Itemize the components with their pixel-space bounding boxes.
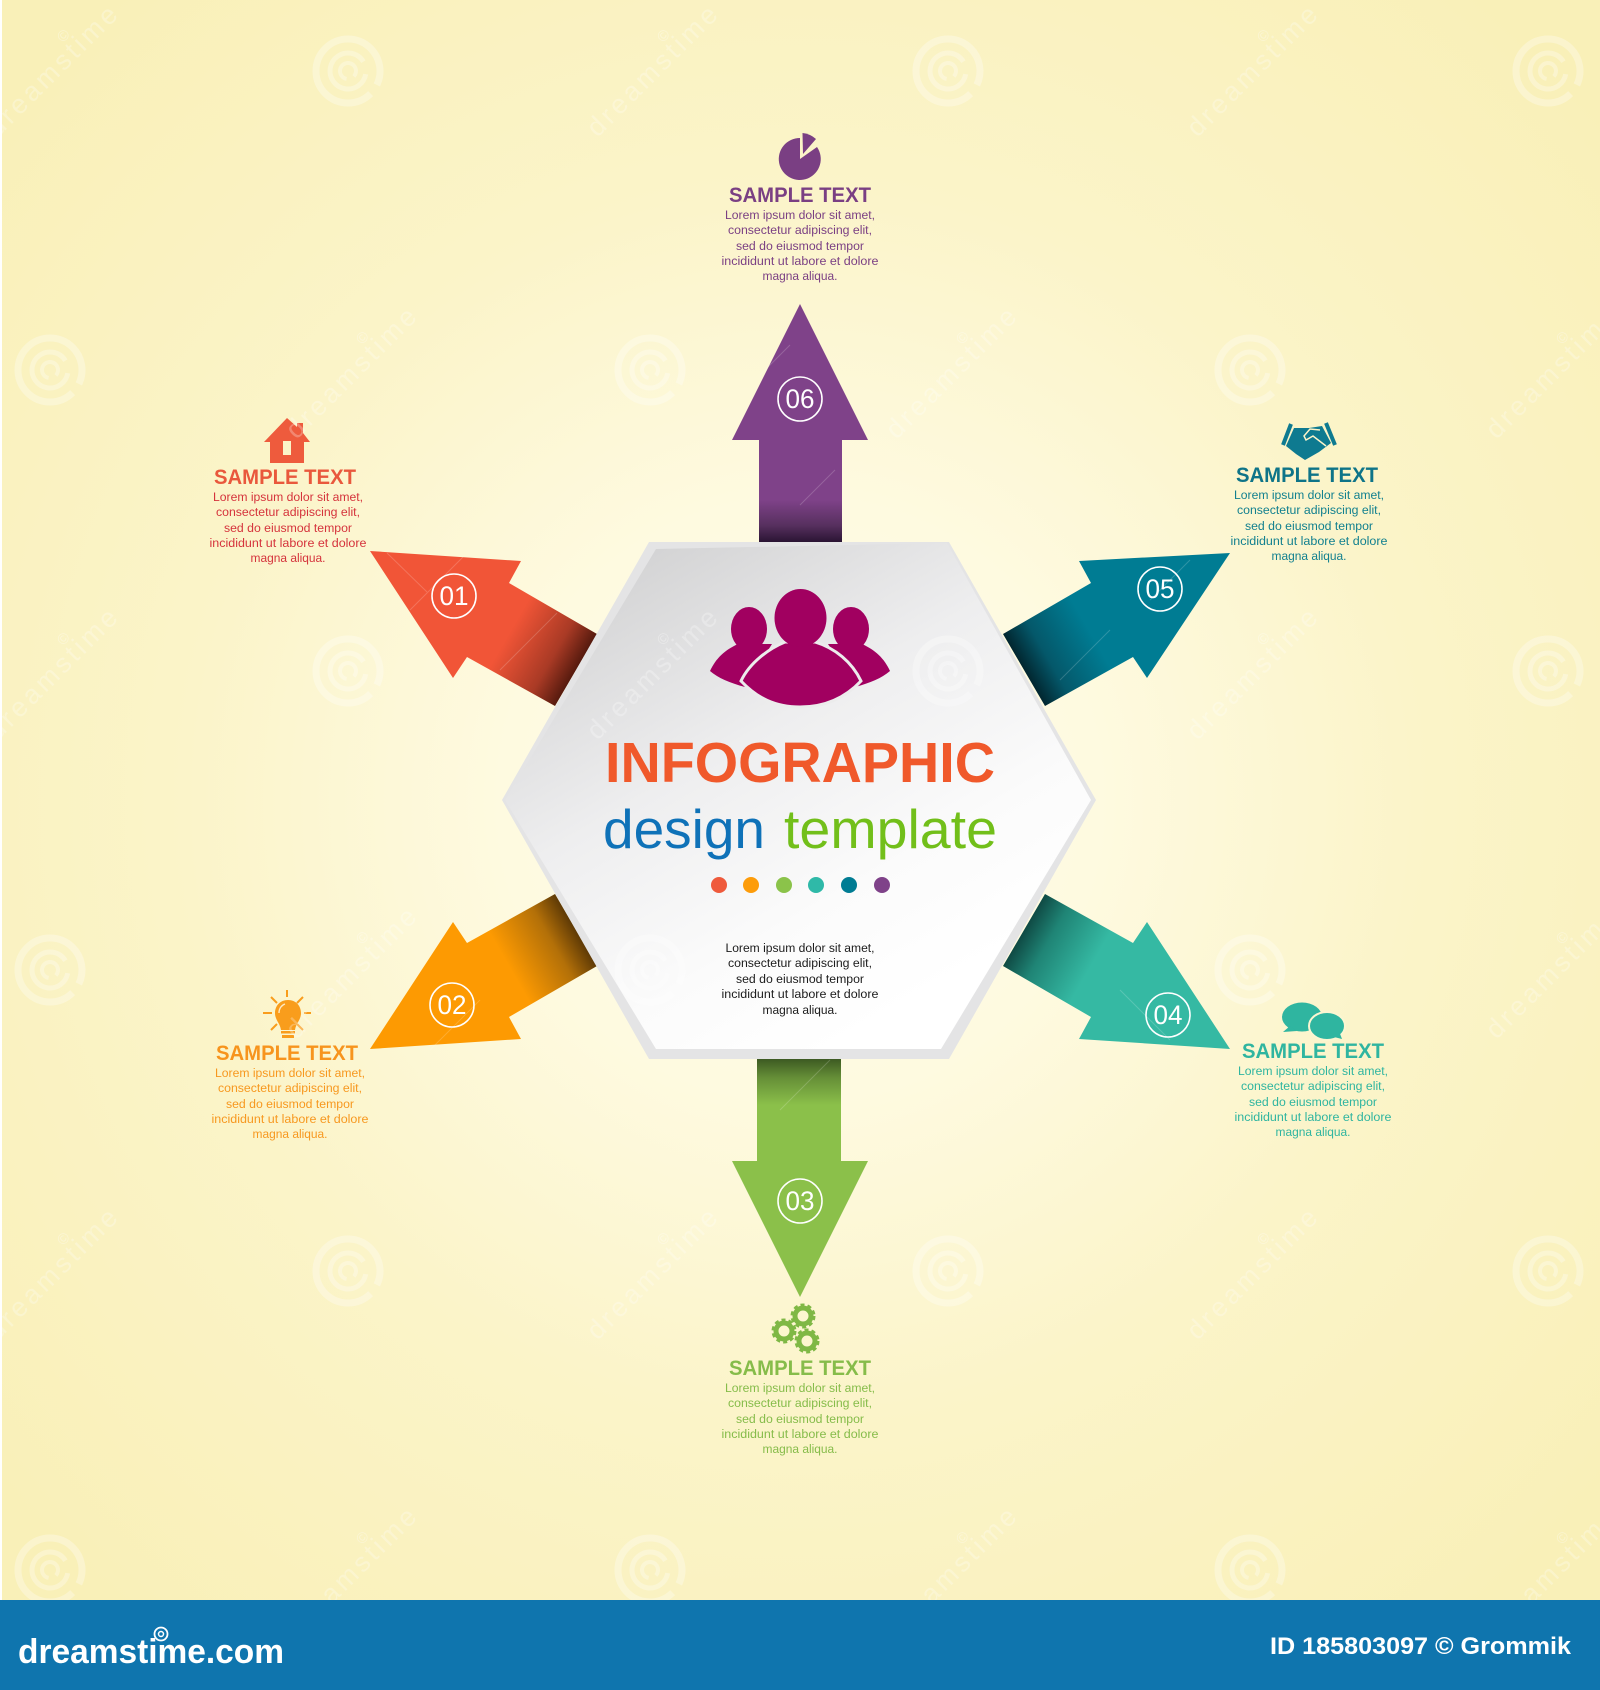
central body text (722, 941, 879, 1017)
text 05 (1230, 488, 1388, 563)
text 01 (210, 490, 367, 565)
watermark overlay: © (654, 26, 674, 46)
watermark overlay: dreamstime (280, 302, 422, 444)
central body text: magna aliqua. (762, 1003, 838, 1017)
heading 01: SAMPLE TEXT (214, 466, 356, 489)
text 04: incididunt ut labore et dolore (1234, 1110, 1392, 1124)
badge 02: 02 (438, 990, 466, 1020)
text 06: magna aliqua. (762, 269, 838, 283)
watermark overlay: © (654, 629, 674, 649)
watermark overlay: © (1553, 328, 1573, 348)
text 04: consectetur adipiscing elit, (1241, 1079, 1385, 1093)
watermark overlay: © (54, 629, 74, 649)
text 06: sed do eiusmod tempor (736, 239, 864, 253)
text 04: sed do eiusmod tempor (1249, 1095, 1377, 1109)
watermark overlay: © (1254, 1229, 1274, 1249)
text 05: sed do eiusmod tempor (1245, 519, 1373, 533)
subtitle: design template (603, 798, 997, 860)
panel: step 06 (722, 133, 879, 283)
heading 04: SAMPLE TEXT (1242, 1040, 1384, 1063)
panel: step 01 (210, 418, 367, 565)
watermark overlay: © (1254, 629, 1274, 649)
text 03: sed do eiusmod tempor (736, 1412, 864, 1426)
central body text: Lorem ipsum dolor sit amet, (726, 941, 874, 955)
arrow 01 red (370, 551, 597, 706)
text 01: consectetur adipiscing elit, (216, 505, 360, 519)
arrow 03 green (732, 1058, 868, 1297)
text 01: sed do eiusmod tempor (224, 521, 352, 535)
central hexagon (502, 542, 1096, 1059)
watermark overlay: © (54, 26, 74, 46)
arrow 05 dark teal (1003, 553, 1230, 706)
icon: house (264, 418, 310, 463)
watermark overlay: © (654, 1229, 674, 1249)
text 02: incididunt ut labore et dolore (212, 1112, 369, 1126)
watermark overlay: dreamstime (1181, 1203, 1323, 1345)
text 01: incididunt ut labore et dolore (210, 536, 367, 550)
title: INFOGRAPHIC: INFOGRAPHIC (605, 731, 995, 795)
heading 05: SAMPLE TEXT (1236, 464, 1378, 487)
text 06: incididunt ut labore et dolore (722, 254, 879, 268)
text 06: Lorem ipsum dolor sit amet, (725, 208, 875, 222)
panel: step 05 (1230, 423, 1388, 563)
icon: chat bubbles (1282, 1002, 1345, 1040)
text 04 (1234, 1064, 1392, 1139)
text 03: Lorem ipsum dolor sit amet, (725, 1381, 875, 1395)
heading 03: SAMPLE TEXT (729, 1357, 871, 1380)
watermark overlay: © (953, 928, 973, 948)
panel: step 04 (1234, 1002, 1392, 1139)
watermark overlay: dreamstime (280, 902, 422, 1044)
badge 06: 06 (786, 384, 814, 414)
watermark overlay: dreamstime (581, 0, 723, 142)
watermark overlay: dreamstime (1181, 603, 1323, 745)
icon: people (710, 589, 890, 707)
arrow 06 purple (732, 304, 868, 543)
watermark overlay: dreamstime (581, 603, 723, 745)
watermark overlay: © (353, 1528, 373, 1548)
text 02 (212, 1066, 369, 1141)
watermark overlay: dreamstime (1181, 0, 1323, 142)
footer image id: ID 185803097 © Grommik (1270, 1633, 1571, 1660)
icon: light bulb (263, 990, 311, 1038)
text 02: sed do eiusmod tempor (226, 1097, 354, 1111)
watermark overlay: © (953, 328, 973, 348)
badge 04: 04 (1154, 1000, 1182, 1030)
badge 03: 03 (786, 1186, 814, 1216)
badge 01: 01 (440, 581, 468, 611)
panel: step 02 (212, 990, 369, 1141)
text 05: Lorem ipsum dolor sit amet, (1234, 488, 1384, 502)
watermark overlay: © (353, 328, 373, 348)
badge 05: 05 (1146, 574, 1174, 604)
badge 01 (432, 574, 476, 618)
text 01: Lorem ipsum dolor sit amet, (213, 490, 363, 504)
text 03: incididunt ut labore et dolore (722, 1427, 879, 1441)
text 05: magna aliqua. (1272, 549, 1346, 563)
central body text: incididunt ut labore et dolore (722, 987, 879, 1001)
panel: step 03 (722, 1305, 879, 1456)
icon: pie chart (779, 133, 821, 180)
colour dots (711, 877, 890, 893)
badge 05 (1138, 567, 1182, 611)
watermark overlay: dreamstime (880, 1502, 1022, 1644)
watermark overlay: © (953, 1528, 973, 1548)
heading 06: SAMPLE TEXT (729, 184, 871, 207)
text 01: magna aliqua. (250, 551, 326, 565)
icon: gears (773, 1305, 818, 1352)
watermark overlay: dreamstime (280, 1502, 422, 1644)
watermark overlay: dreamstime (880, 302, 1022, 444)
text 03 (722, 1381, 879, 1456)
text 06 (722, 208, 879, 283)
badge 04 (1146, 993, 1190, 1037)
watermark overlay: © (1553, 928, 1573, 948)
watermark overlay: © (54, 1229, 74, 1249)
text 02: magna aliqua. (252, 1127, 328, 1141)
watermark overlay: © (1553, 1528, 1573, 1548)
badge 03 (778, 1179, 822, 1223)
badge 02 (430, 983, 474, 1027)
subtitle: design template: design (603, 798, 765, 860)
badge 06 (778, 377, 822, 421)
arrow 02 orange (370, 894, 597, 1049)
watermark overlay: dreamstime (880, 902, 1022, 1044)
watermark overlay: © (1254, 26, 1274, 46)
heading 02: SAMPLE TEXT (216, 1042, 358, 1065)
text 05: incididunt ut labore et dolore (1230, 534, 1388, 548)
footer bar (0, 1600, 1600, 1690)
text 06: consectetur adipiscing elit, (728, 223, 872, 237)
central body text: sed do eiusmod tempor (736, 972, 864, 986)
text 05: consectetur adipiscing elit, (1237, 503, 1381, 517)
text 04: Lorem ipsum dolor sit amet, (1238, 1064, 1388, 1078)
text 03: magna aliqua. (762, 1442, 838, 1456)
watermark overlay: © (353, 928, 373, 948)
footer logo: dreamstime.com (18, 1633, 284, 1671)
text 04: magna aliqua. (1276, 1125, 1350, 1139)
text 02: consectetur adipiscing elit, (218, 1081, 362, 1095)
subtitle: design template: template (784, 798, 997, 860)
text 03: consectetur adipiscing elit, (728, 1396, 872, 1410)
central body text: consectetur adipiscing elit, (728, 956, 872, 970)
text 02: Lorem ipsum dolor sit amet, (215, 1066, 365, 1080)
arrow 04 teal (1003, 894, 1230, 1049)
icon: handshake (1283, 423, 1335, 460)
watermark overlay: dreamstime (581, 1203, 723, 1345)
